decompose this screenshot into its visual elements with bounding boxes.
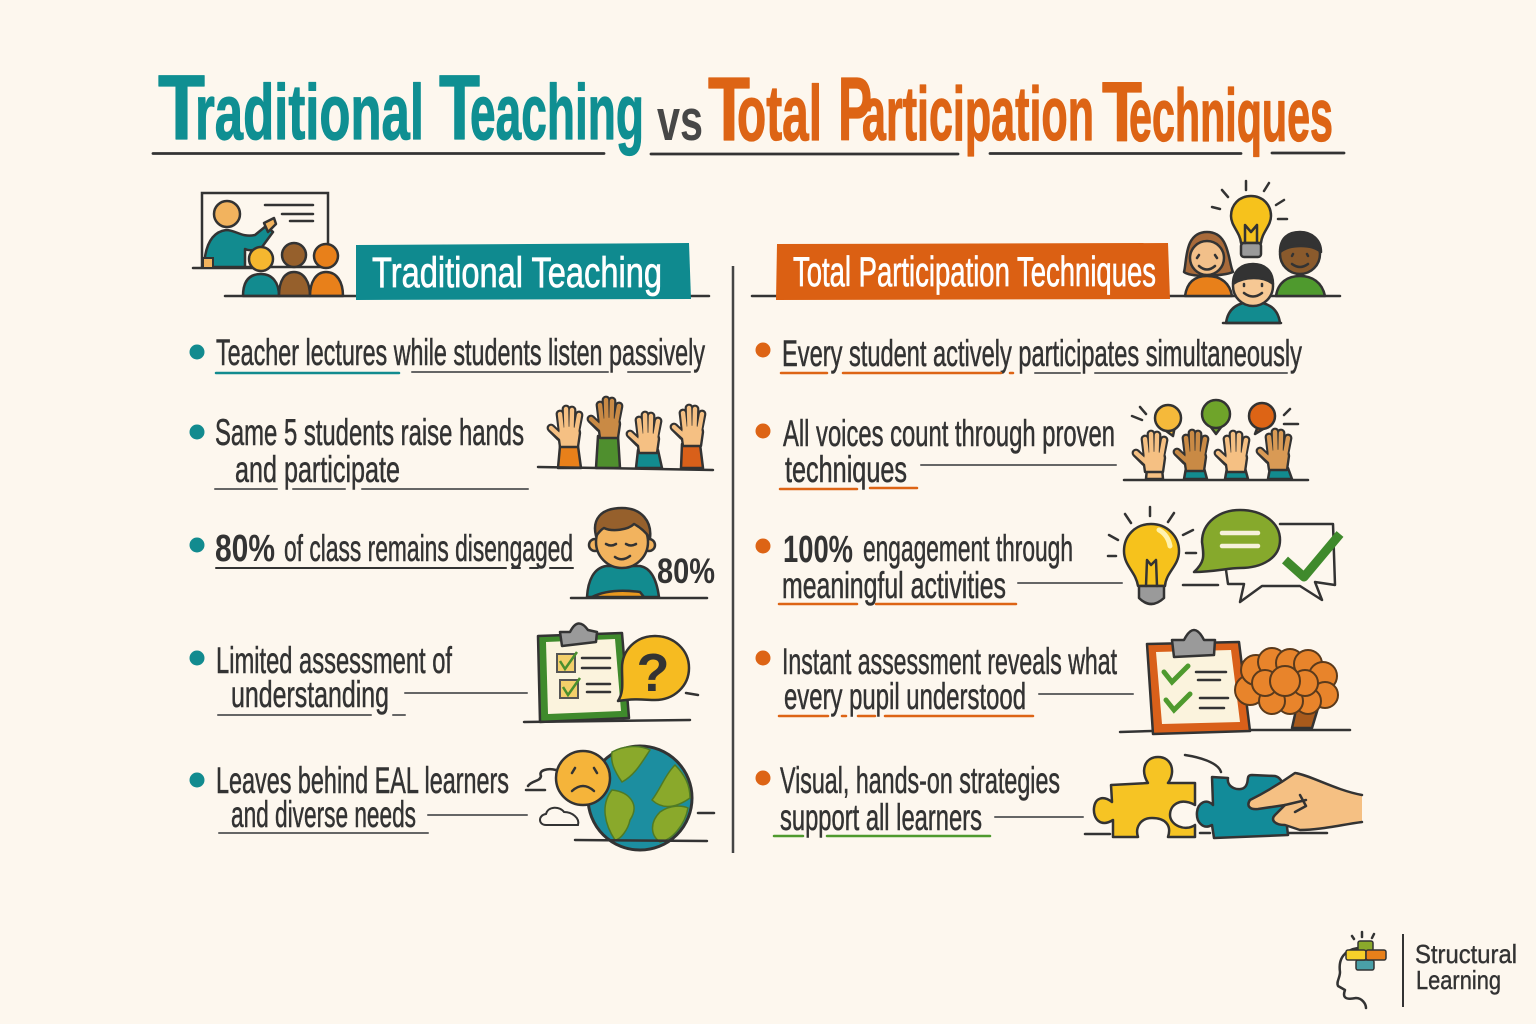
bullet: same 5 students: and participate (235, 449, 400, 490)
icon: puzzle pieces and hand (1085, 755, 1362, 838)
bullet: all voices count: techniques (785, 449, 907, 490)
icon: four raised hands (538, 400, 713, 470)
logo: Structural Learning: Structural (1415, 939, 1517, 969)
bullet: 100 percent engagement: 100% (783, 529, 853, 571)
icon: lightbulb, speech bubble and check (1108, 507, 1340, 604)
icon: sad face and globe (526, 746, 714, 850)
title: T (1102, 65, 1142, 159)
bullet: instant assessment (756, 641, 1133, 717)
icon: clipboard and brain (1120, 630, 1350, 734)
bullet: teacher lectures: Teacher lectures while students listen passively (216, 332, 705, 373)
title: T (158, 57, 205, 159)
heading banner: traditional teaching (225, 243, 709, 300)
bullet: 100 percent engagement: engagement through (863, 528, 1073, 569)
icon: disengaged student with 80%: 80% (657, 552, 715, 591)
bullet: 80 percent disengaged (190, 528, 573, 570)
title: eaching (470, 68, 644, 156)
bullet: same 5 students (190, 412, 528, 490)
icon: disengaged student with 80% (571, 508, 715, 598)
bullet: instant assessment: Instant assessment reveals what (782, 641, 1117, 682)
heading banner: total participation techniques: Total Participation Techniques (793, 248, 1156, 295)
icon: students with lightbulb (1184, 181, 1325, 323)
divider between columns (732, 266, 734, 853)
panel: total participation techniques (752, 181, 1362, 838)
bullet: visual strategies: Visual, hands-on strategies (780, 760, 1060, 801)
title: otal (737, 69, 822, 157)
bullet: 100 percent engagement: meaningful activities (782, 565, 1006, 606)
icon: clipboard with question bubble (524, 623, 698, 722)
bullet: instant assessment: every pupil understood (784, 676, 1026, 717)
bullet: 80 percent disengaged: 80% (215, 528, 275, 570)
title: T (439, 57, 480, 159)
title: raditional (195, 68, 424, 156)
title: vs (657, 88, 703, 153)
logo: Structural Learning: Learning (1416, 965, 1501, 995)
bullet: all voices count: All voices count through proven (783, 413, 1115, 454)
bullet: 100 percent engagement (756, 528, 1122, 606)
heading banner: traditional teaching: Traditional Teaching (372, 249, 662, 297)
bullet: all voices count (756, 413, 1116, 490)
title (153, 57, 1344, 160)
bullet: visual strategies: support all learners (780, 797, 982, 838)
bullet: 80 percent disengaged: of class remains disengaged (284, 528, 573, 569)
title: echniques (1129, 74, 1333, 157)
bullet: same 5 students: Same 5 students raise hands (215, 412, 524, 453)
title: P (838, 60, 872, 160)
bullet: EAL learners: and diverse needs (231, 794, 416, 835)
bullet: limited assessment: understanding (231, 674, 389, 715)
bullet: every student (756, 333, 1302, 374)
bullet: limited assessment (190, 640, 527, 715)
bullet: EAL learners: Leaves behind EAL learners (216, 760, 509, 801)
icon: clipboard with question bubble: ? (636, 643, 670, 703)
bullet: teacher lectures (190, 332, 705, 373)
bullet: visual strategies (756, 760, 1083, 838)
title: T (708, 60, 750, 160)
icon: teacher and students (193, 193, 343, 296)
logo: Structural Learning (1337, 932, 1517, 1008)
icon: hands with speech bubbles (1124, 400, 1308, 480)
bullet: limited assessment: Limited assessment of (216, 640, 452, 681)
panel: traditional teaching (190, 193, 715, 850)
title: articipation (862, 72, 1094, 157)
bullet: EAL learners (190, 760, 527, 835)
